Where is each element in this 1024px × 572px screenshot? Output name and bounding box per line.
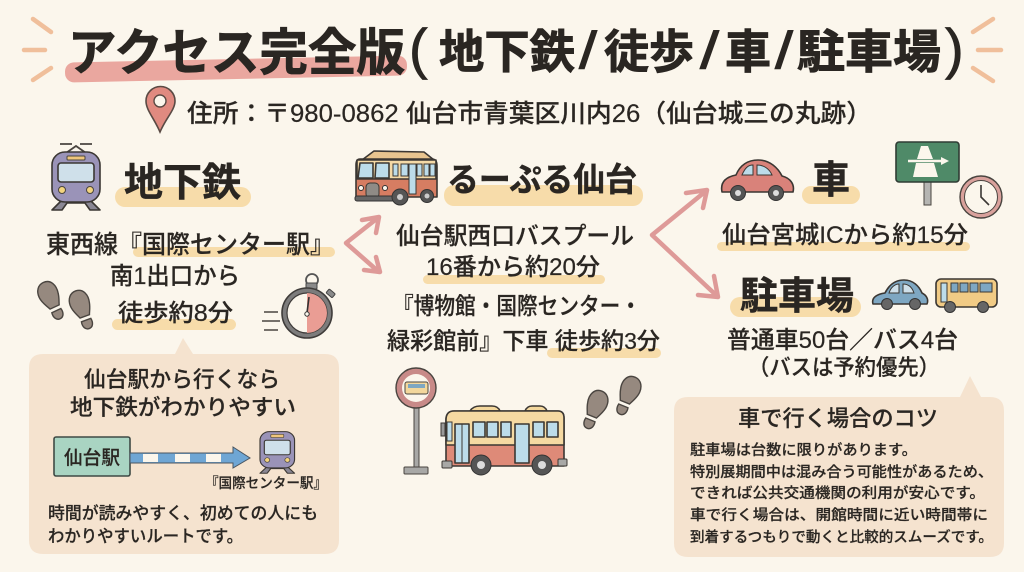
title: / <box>579 22 598 80</box>
bus route text: 仙台駅西口バスプール <box>396 223 634 250</box>
walk text: minami exit: 南1出口から <box>110 263 240 290</box>
panel heading <box>70 367 296 420</box>
icon: retro bus <box>355 151 437 205</box>
decorative title sparks <box>24 19 1001 81</box>
panel heading: 仙台駅から行くなら <box>84 367 280 392</box>
station label: 『国際センター駅』 <box>205 475 327 491</box>
panel: car tips <box>674 376 1004 557</box>
title: 車 <box>725 26 771 78</box>
icon: stopwatch <box>262 274 335 338</box>
bus stop text: 『博物館・国際センター・ <box>393 293 641 319</box>
icon: location pin <box>146 86 175 132</box>
heading: subway: 地下鉄 <box>124 162 241 205</box>
walk text: minami exit: 徒歩約8分 <box>118 300 233 327</box>
bus route text <box>396 223 634 284</box>
icon: bus stop <box>396 368 436 474</box>
title: アクセス完全版 <box>68 25 405 81</box>
arrows: to car and parking <box>652 190 718 297</box>
icon: yellow bus <box>936 279 997 312</box>
panel heading: 地下鉄がわかりやすい <box>70 395 296 420</box>
title: 駐車場 <box>797 26 941 78</box>
panel body text <box>48 503 318 546</box>
heading: loople Sendai: るーぷる仙台 <box>447 161 637 198</box>
bus stop text: 緑彩館前』下車 徒歩約3分 <box>387 328 660 354</box>
icon: blue car <box>873 280 928 310</box>
title: ) <box>945 17 964 80</box>
heading: car <box>802 160 860 204</box>
icon: small train <box>260 432 295 473</box>
icon: clock <box>960 176 1002 218</box>
heading: car: 車 <box>812 160 850 202</box>
panel: from Sendai station <box>29 338 339 554</box>
panel body text: できれば公共交通機関の利用が安心です。 <box>690 484 985 502</box>
panel body text: 到着するつもりで動くと比較的スムーズです。 <box>690 528 993 546</box>
panel body text <box>690 441 993 546</box>
icon: footprints <box>34 278 94 330</box>
title: 徒歩 <box>604 26 694 78</box>
title: / <box>775 22 794 80</box>
panel body text: 時間が読みやすく、初めての人にも <box>48 503 318 523</box>
address: 住所：〒980-0862 仙台市青葉区川内26（仙台城三の丸跡） <box>187 100 872 128</box>
title: ( <box>409 17 428 80</box>
panel body text: 特別展期間中は混み合う可能性があるため、 <box>690 463 993 481</box>
title: 地下鉄 <box>439 26 575 78</box>
bus route text: 16番から約20分 <box>426 254 600 281</box>
icon: highway sign <box>896 142 959 205</box>
panel heading: 車で行く場合のコツ <box>738 406 938 431</box>
icon: subway train <box>52 144 100 210</box>
icon: city bus <box>441 406 567 475</box>
station sign <box>54 437 130 476</box>
station sign: 仙台駅 <box>64 447 120 469</box>
icon: red car <box>722 160 793 200</box>
panel body text: 車で行く場合は、開館時間に近い時間帯に <box>690 507 988 524</box>
arrows: subway to loople <box>346 217 380 272</box>
bus stop text <box>387 293 661 358</box>
title: / <box>700 22 720 80</box>
icon: footprints near bus <box>582 374 644 430</box>
walk text: minami exit <box>110 263 240 330</box>
panel body text: わかりやすいルートです。 <box>48 527 243 546</box>
title <box>65 17 964 83</box>
heading: parking: 駐車場 <box>740 276 854 318</box>
subway line text: 東西線『国際センター駅』 <box>46 231 334 259</box>
panel body text: 駐車場は台数に限りがあります。 <box>690 441 917 459</box>
parking text <box>727 327 958 380</box>
parking text: （バスは予約優先） <box>748 355 940 380</box>
route arrow <box>130 447 250 468</box>
car route text: 仙台宮城ICから約15分 <box>722 222 968 249</box>
parking text: 普通車50台／バス4台 <box>727 327 958 354</box>
